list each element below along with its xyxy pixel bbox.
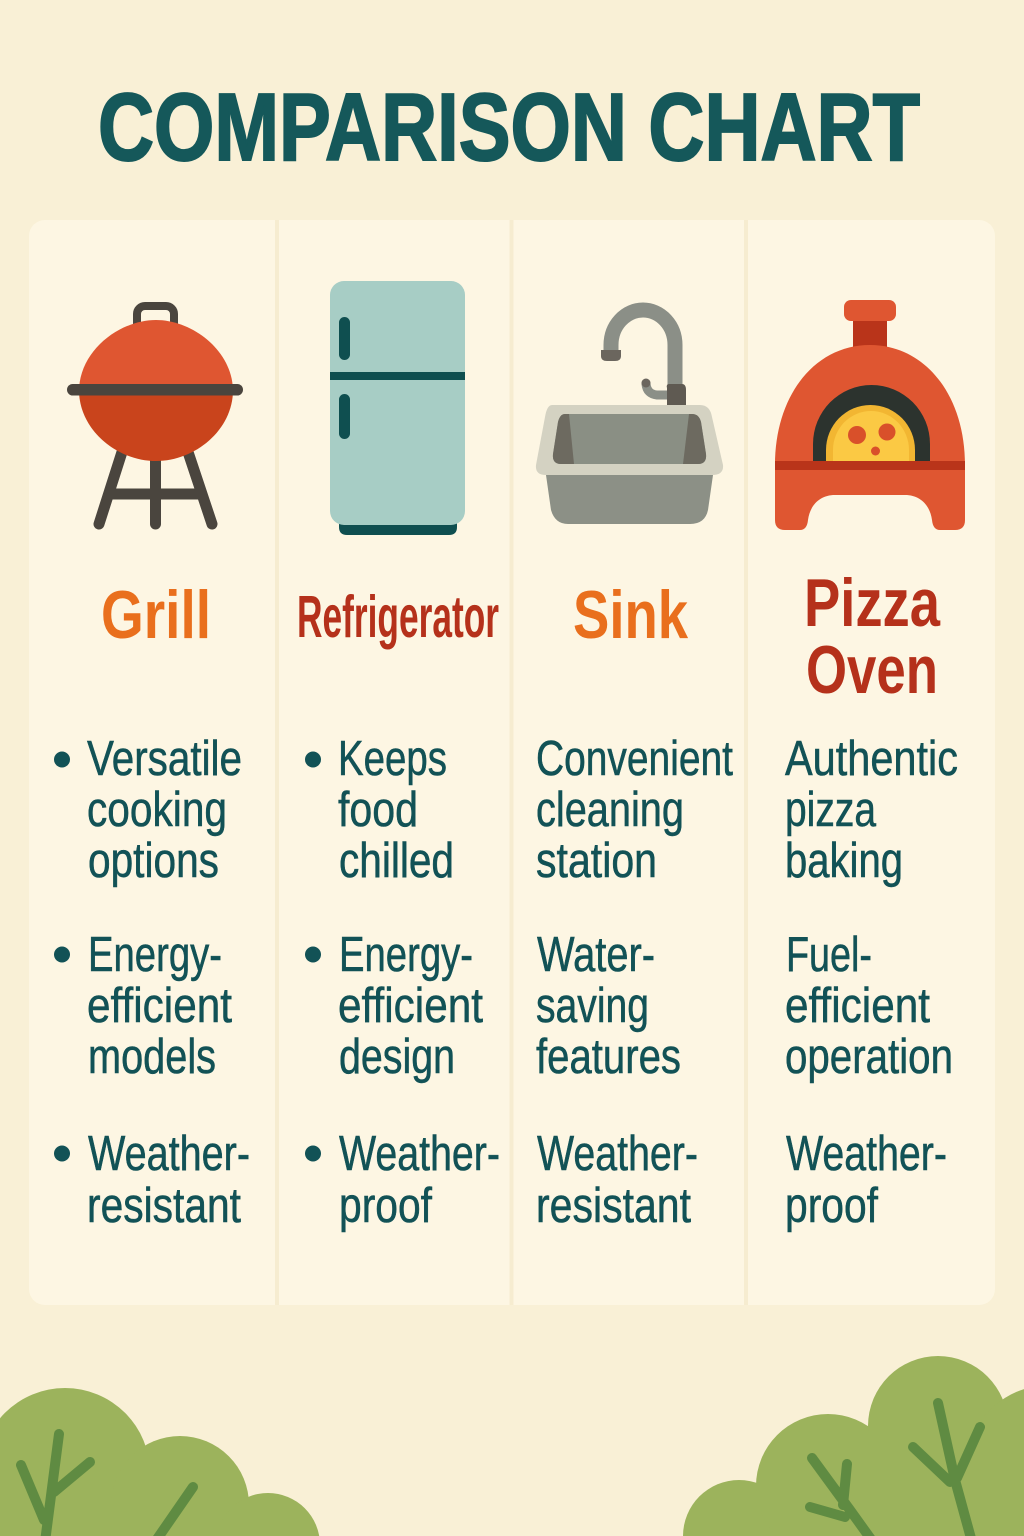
icon: refrigerator: [330, 281, 465, 535]
heading: pizza oven: [804, 565, 941, 708]
feature list: refrigerator: design: [339, 1029, 455, 1084]
feature list: refrigerator: chilled: [339, 833, 454, 888]
column: refrigerator: [297, 281, 500, 1233]
feature list: refrigerator: [305, 731, 500, 1233]
bush: bottom left: [0, 1388, 320, 1536]
feature list: grill: Weather-: [88, 1126, 250, 1181]
feature list: sink: [536, 731, 733, 1233]
comparison table panel: [29, 220, 995, 1305]
feature list: pizza oven: proof: [785, 1178, 878, 1233]
feature list: pizza oven: operation: [785, 1029, 953, 1084]
feature list: grill: efficient: [87, 978, 232, 1033]
column: sink: [536, 310, 733, 1233]
feature list: sink: station: [536, 833, 657, 888]
feature list: pizza oven: Weather-: [786, 1126, 947, 1181]
feature list: sink: Convenient: [536, 731, 733, 786]
feature list: grill: [54, 731, 250, 1233]
feature list: sink: Water-: [537, 927, 655, 982]
feature list: grill: models: [88, 1029, 216, 1084]
feature list: grill: cooking: [87, 782, 227, 837]
feature list: pizza oven: [785, 731, 958, 1233]
feature list: refrigerator: food: [338, 782, 418, 837]
feature list: pizza oven: Fuel-: [786, 927, 872, 982]
feature list: sink: cleaning: [536, 782, 684, 837]
feature list: refrigerator: Keeps: [338, 731, 447, 786]
feature list: sink: saving: [536, 978, 649, 1033]
feature list: refrigerator: proof: [339, 1178, 432, 1233]
feature list: sink: Weather-: [537, 1126, 698, 1181]
feature list: grill: options: [88, 833, 219, 888]
feature list: sink: resistant: [536, 1178, 691, 1233]
feature list: refrigerator: Weather-: [339, 1126, 500, 1181]
feature list: pizza oven: baking: [785, 833, 903, 888]
column: grill: [54, 306, 250, 1233]
feature list: sink: features: [536, 1029, 681, 1084]
feature list: pizza oven: Authentic: [785, 731, 958, 786]
heading: pizza oven: Oven: [806, 632, 938, 708]
heading: refrigerator: Refrigerator: [297, 584, 499, 650]
heading: grill: Grill: [101, 577, 211, 653]
column: pizza oven: [775, 300, 965, 1233]
feature list: pizza oven: pizza: [785, 782, 876, 837]
feature list: pizza oven: efficient: [785, 978, 930, 1033]
icon: grill: [67, 306, 243, 524]
bush: bottom right: [683, 1356, 1024, 1536]
icon: pizza oven: [775, 300, 965, 530]
feature list: refrigerator: Energy-: [339, 927, 473, 982]
icon: sink: [536, 310, 723, 524]
heading: pizza oven: Pizza: [804, 565, 941, 641]
feature list: grill: Versatile: [87, 731, 242, 786]
heading: sink: Sink: [573, 577, 688, 653]
feature list: grill: Energy-: [88, 927, 222, 982]
feature list: refrigerator: efficient: [338, 978, 483, 1033]
feature list: grill: resistant: [87, 1178, 241, 1233]
